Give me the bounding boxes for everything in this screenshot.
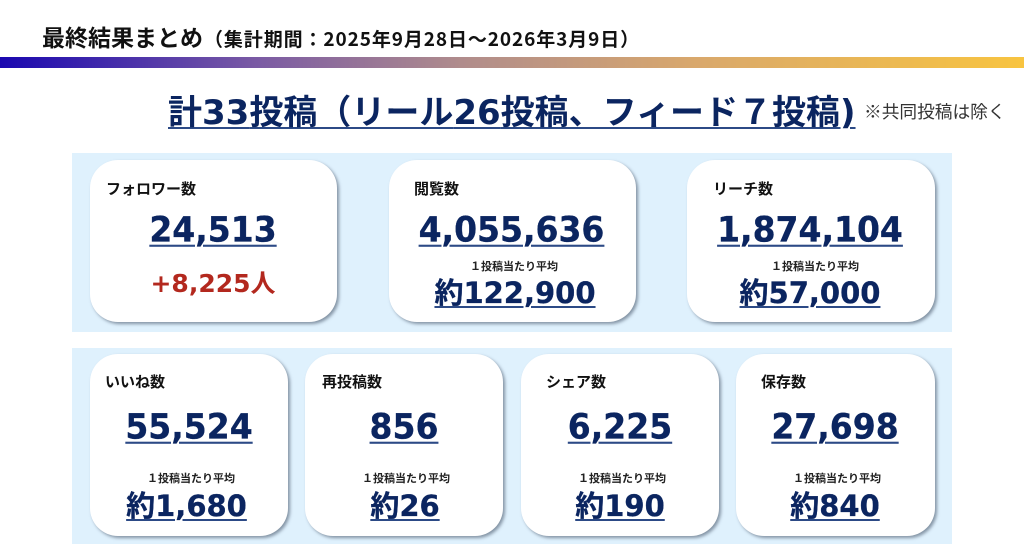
label: saves: 保存数 (761, 371, 806, 392)
card: likes (90, 354, 288, 536)
value: reposts average: 約26 (370, 489, 440, 523)
value: reach average: 約57,000 (740, 276, 880, 310)
label: per-post average: １投稿当たり平均 (362, 470, 450, 486)
label: per-post average: １投稿当たり平均 (793, 470, 881, 486)
label: reach: リーチ数 (713, 178, 773, 199)
value: followers: 24,513 (149, 209, 277, 250)
value: saves average: 約840 (790, 489, 880, 523)
label: shares: シェア数 (546, 371, 606, 392)
headline: total posts: 計33投稿（リール26投稿、フィード７投稿) (168, 85, 856, 134)
card: reach (687, 160, 935, 322)
value: shares: 6,225 (568, 406, 672, 447)
value: views: 4,055,636 (419, 209, 604, 250)
value: views average: 約122,900 (434, 276, 596, 310)
gradient band (0, 57, 1024, 68)
label: views: 閲覧数 (414, 178, 459, 199)
panel: top metrics (72, 153, 952, 332)
label: reposts: 再投稿数 (322, 371, 382, 392)
value: likes average: 約1,680 (126, 489, 247, 523)
label: per-post average: １投稿当たり平均 (771, 258, 859, 274)
label: per-post average: １投稿当たり平均 (147, 470, 235, 486)
label: per-post average: １投稿当たり平均 (578, 470, 666, 486)
value: likes: 55,524 (125, 406, 253, 447)
value: reach: 1,874,104 (717, 209, 903, 250)
label: per-post average: １投稿当たり平均 (470, 258, 558, 274)
card: shares (521, 354, 719, 536)
heading: summary title with period: 最終結果まとめ（集計期間：2025年9月28日～2026年3月9日） (42, 19, 640, 53)
value: reposts: 856 (370, 406, 438, 447)
card: reposts (305, 354, 503, 536)
label: likes: いいね数 (105, 371, 165, 392)
panel: bottom metrics (72, 348, 952, 544)
note: excludes collaborative posts: ※共同投稿は除く (864, 98, 1006, 124)
value: shares average: 約190 (575, 489, 665, 523)
card: followers (90, 160, 337, 322)
label: followers: フォロワー数 (106, 178, 196, 199)
card: views (389, 160, 636, 322)
value: saves: 27,698 (771, 406, 899, 447)
value: follower gain: +8,225人 (150, 269, 276, 298)
card: saves (736, 354, 935, 536)
